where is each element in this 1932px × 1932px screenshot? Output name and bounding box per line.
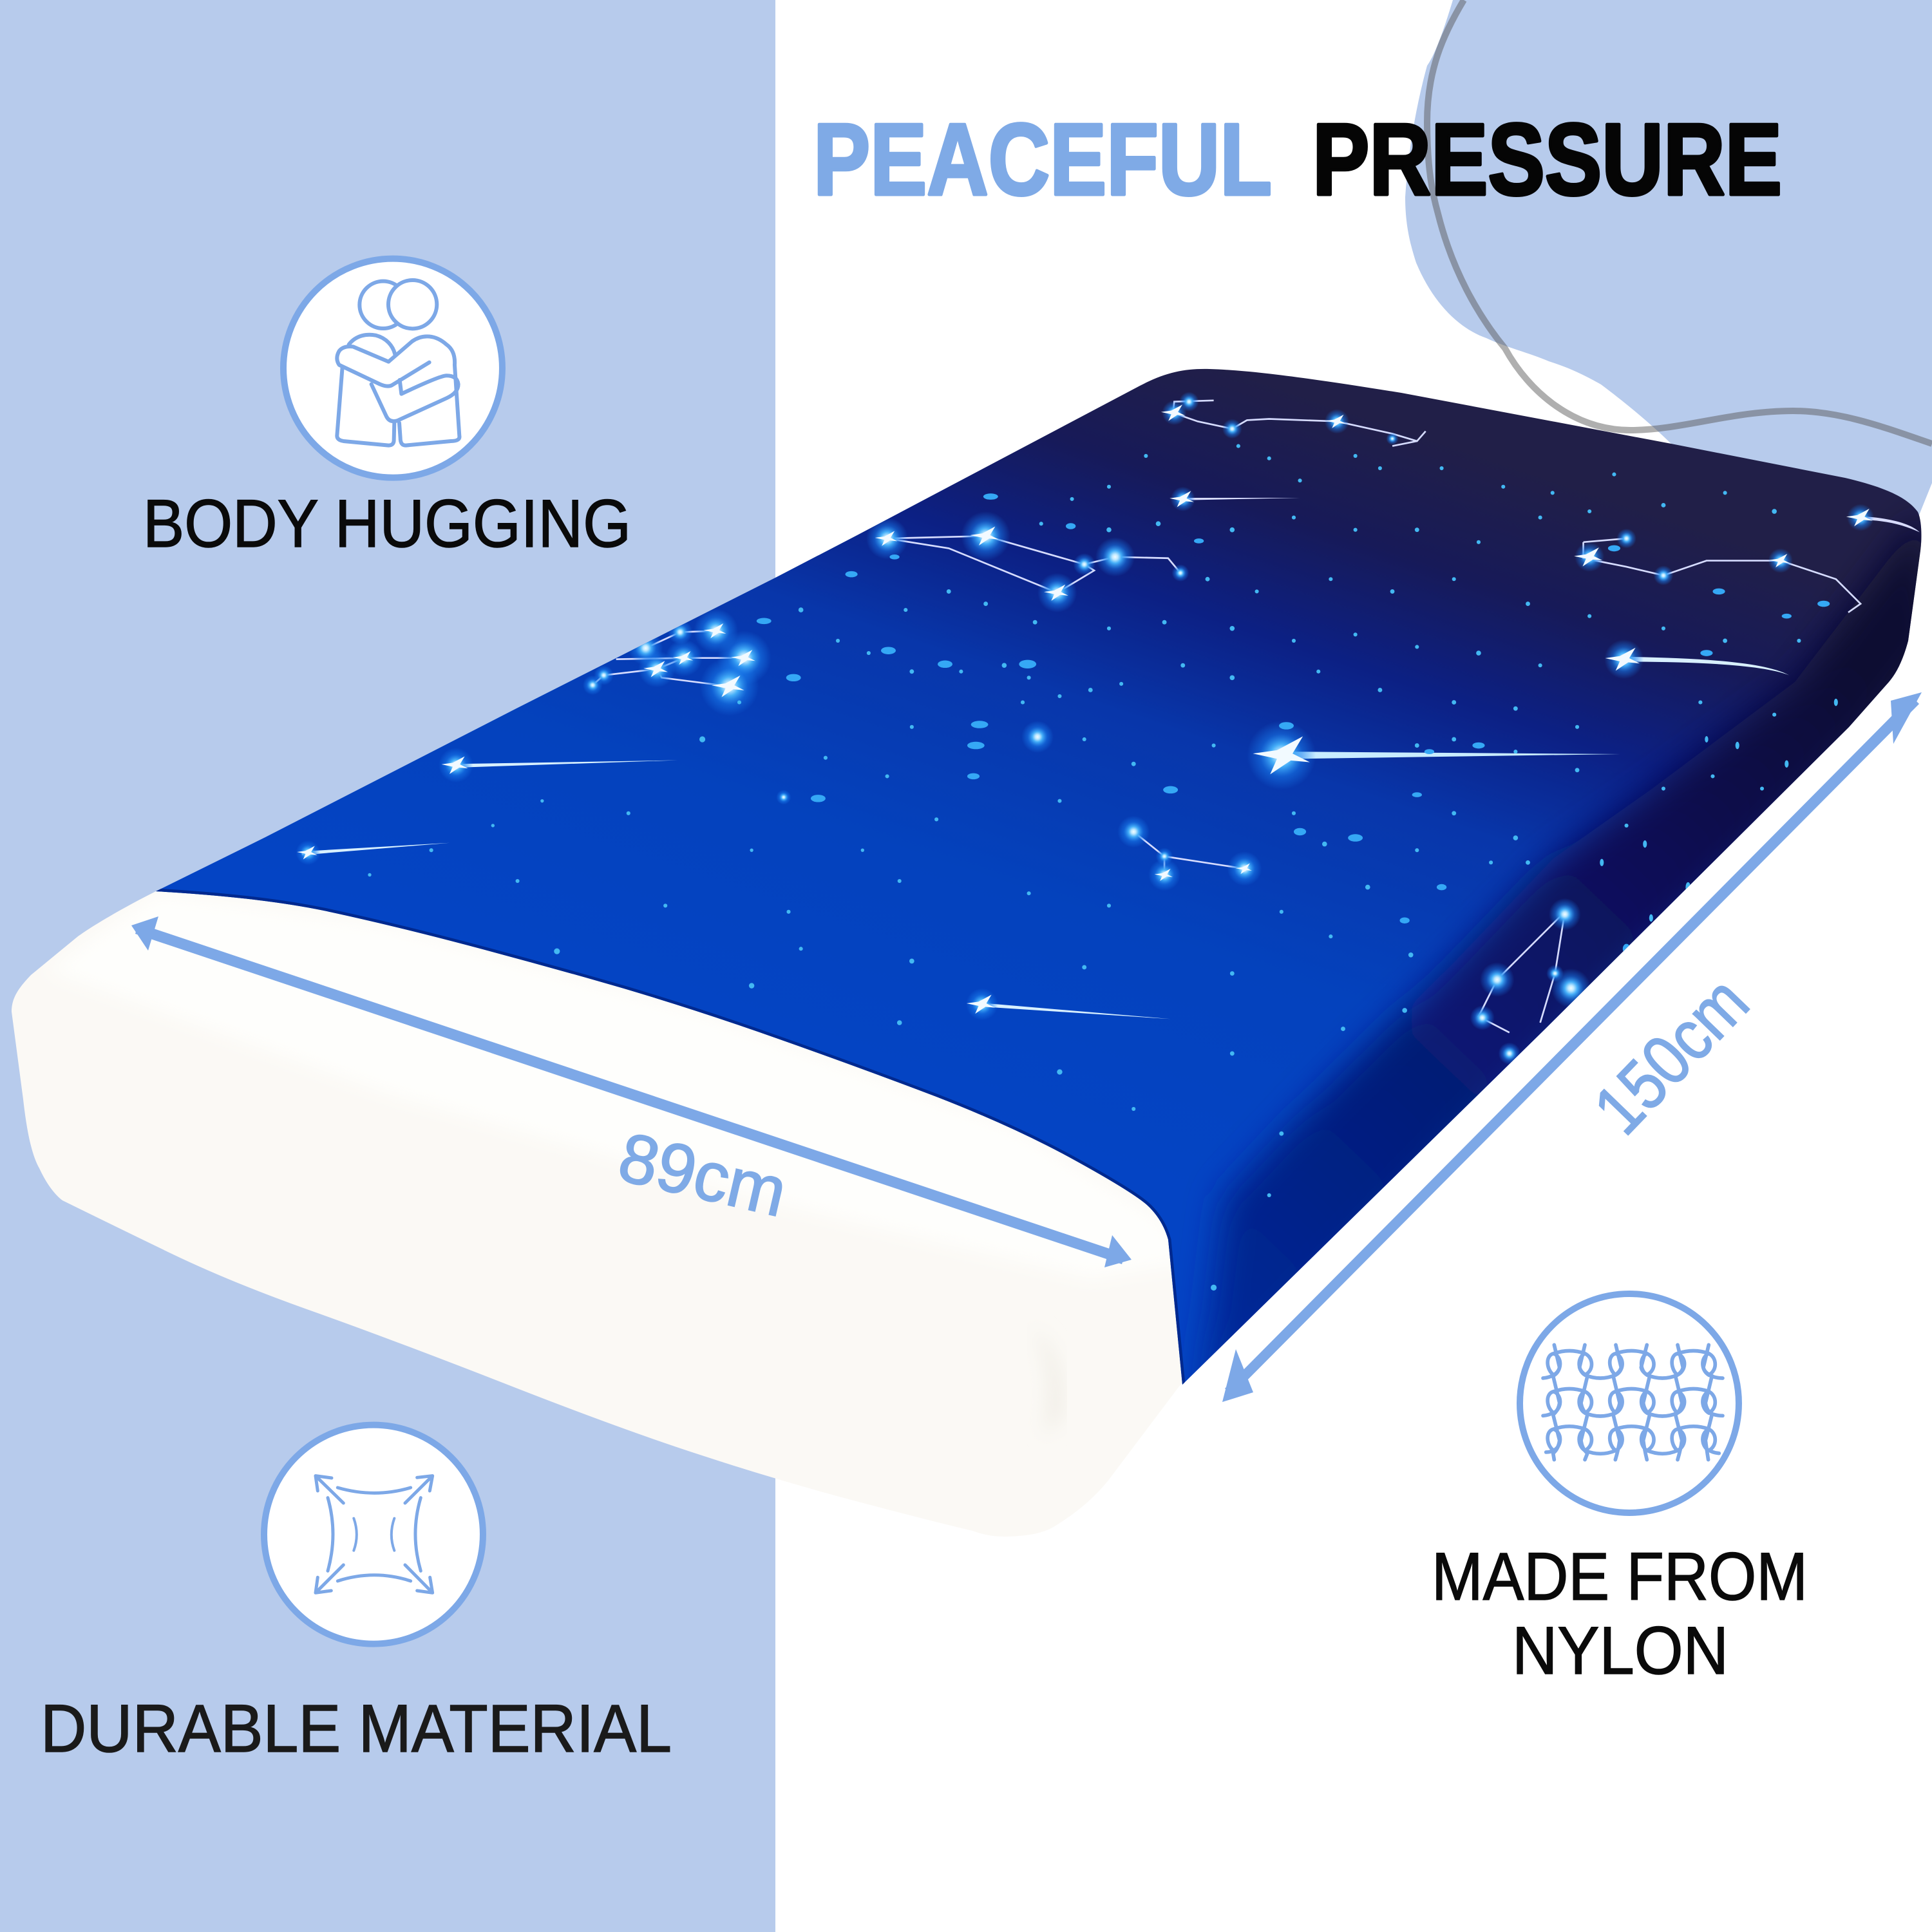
star bursts: [297, 404, 1873, 1014]
icon: durable stretch material: [264, 1425, 483, 1644]
mattress: white base: [12, 891, 1182, 1537]
label: made from nylon: [1432, 1539, 1808, 1689]
dimension arrow: 150cm length: [1222, 692, 1922, 1402]
label: body hugging: BODY HUGGING: [143, 486, 631, 562]
icon: body hugging: [283, 259, 502, 478]
dimension label: 89cm: 89cm: [612, 1117, 794, 1231]
label: durable material: DURABLE MATERIAL: [41, 1691, 672, 1766]
star dots: [368, 444, 1838, 1291]
title: PRESSURE: [1312, 103, 1782, 216]
title: [813, 103, 1782, 216]
glowing stars: [296, 392, 1874, 1065]
seam along sheet hem: [156, 891, 1182, 1385]
label: made from nylon: MADE FROM: [1432, 1539, 1808, 1615]
decorative blob: top right: [1405, 0, 1932, 529]
flattened glow dots: [757, 493, 1830, 954]
dimension arrow: 89cm width: [131, 916, 1132, 1267]
dimension label: 150cm: 150cm: [1579, 962, 1763, 1149]
title: PEACEFUL: [813, 103, 1272, 216]
constellations and stars: [296, 392, 1920, 1291]
decorative curved grey line: [1427, 0, 1932, 444]
panel: left blue column: [0, 0, 775, 1932]
sheet side face shading: [1198, 515, 1932, 1417]
fitted sheet: starry night print: [129, 354, 1932, 1417]
icon: nylon knit fabric: [1520, 1294, 1739, 1513]
label: made from nylon: NYLON: [1512, 1613, 1728, 1689]
shooting star trails: [302, 498, 1920, 1019]
